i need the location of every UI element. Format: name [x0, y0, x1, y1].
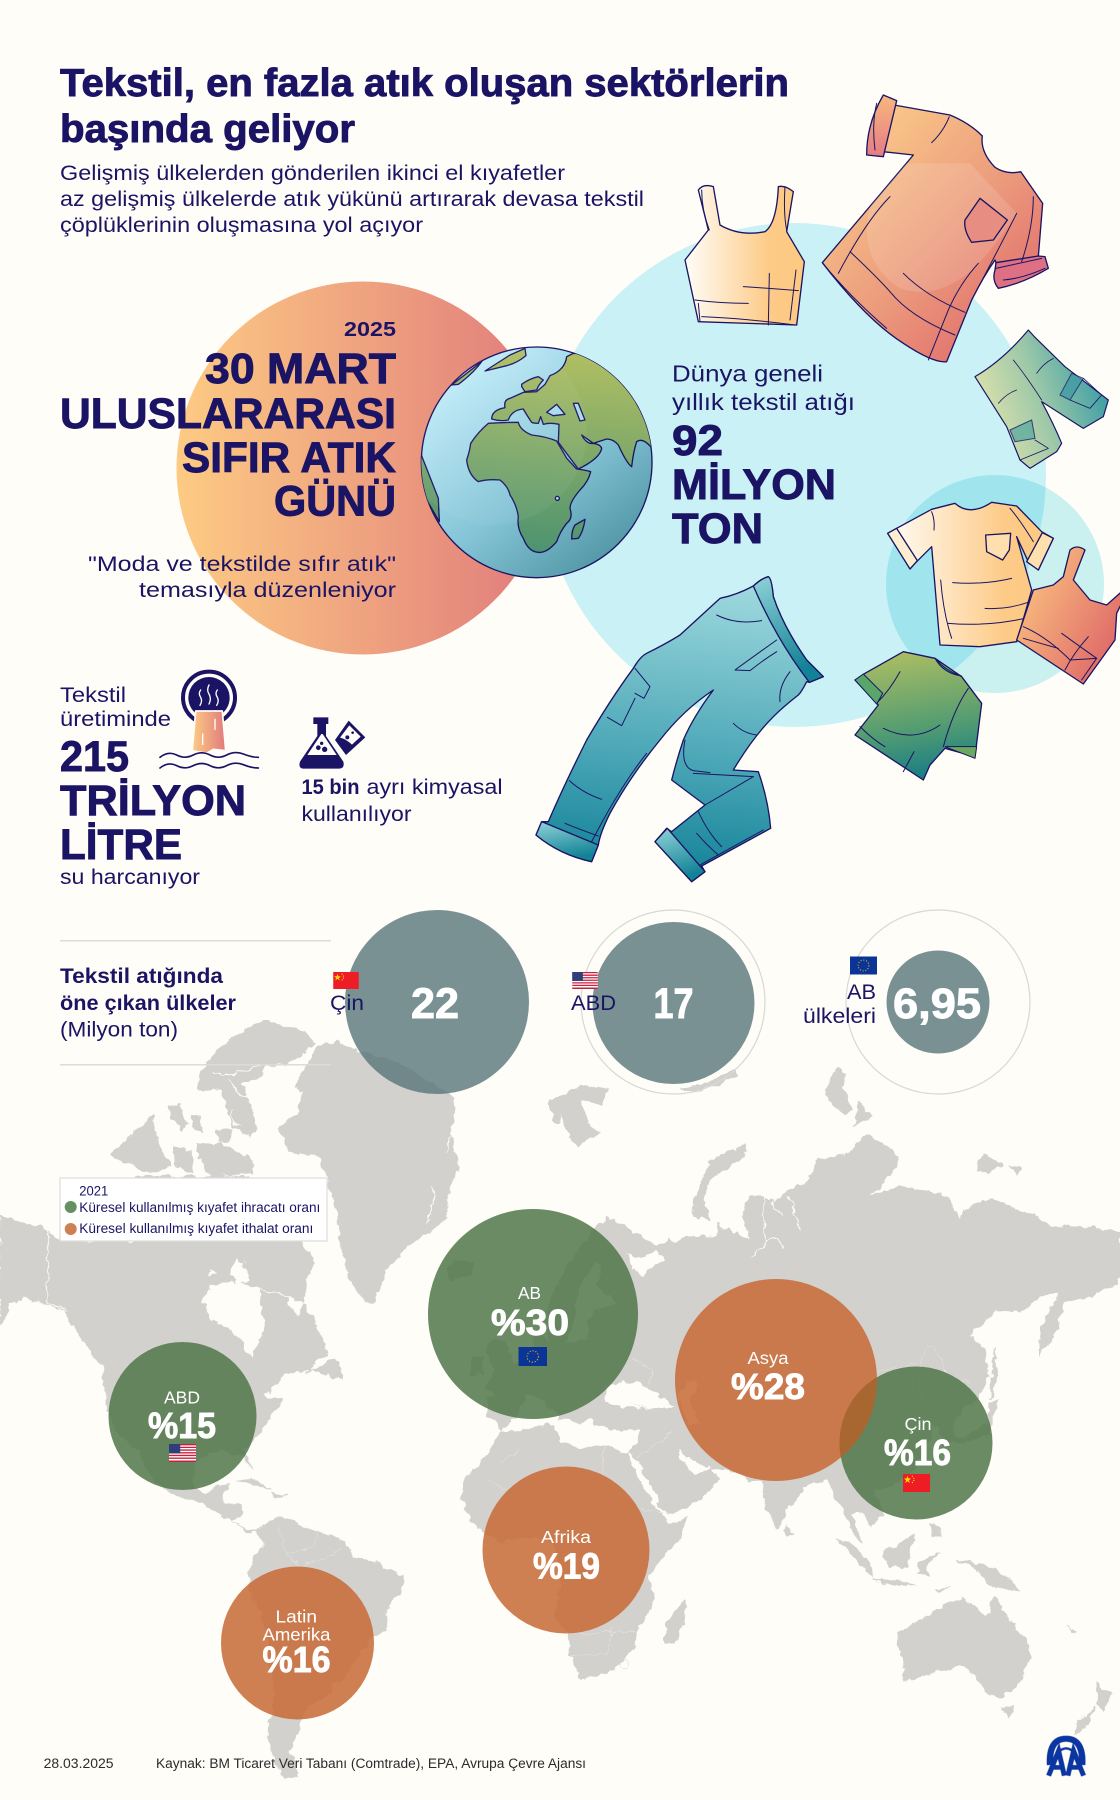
text block: 215 trilyon litre: Tekstil	[60, 684, 126, 707]
bubble: EU export 30%	[428, 1209, 638, 1419]
text block: leading countries heading: Tekstil atığında	[60, 965, 223, 988]
text block: 30 Mart: temasıyla düzenleniyor	[139, 578, 396, 602]
text block: 215 trilyon litre: TRİLYON	[60, 777, 246, 825]
map: africa, south asia, australia and oceania	[463, 1425, 1114, 1733]
text block: 92 milyon ton	[672, 360, 855, 553]
bubble: USA 17: 17	[654, 980, 694, 1028]
legend: Küresel kullanılmış kıyafet ihracatı oranı	[79, 1200, 320, 1215]
bubble: China 22	[330, 910, 529, 1094]
text block: 30 Mart: ULUSLARARASI	[60, 390, 396, 438]
text block: 15 bin kimyasal: ayrı kimyasal	[366, 776, 502, 799]
icon: orange t-shirt	[822, 95, 1048, 362]
world map	[0, 1020, 1120, 1778]
legend	[60, 1178, 327, 1241]
icon: jeans	[536, 577, 823, 882]
bubble: USA 17	[571, 910, 765, 1094]
header: title: Tekstil, en fazla atık oluşan sektörlerin	[60, 62, 789, 105]
bubble: Africa import 19%: %19	[533, 1546, 600, 1586]
panel: light blue circle	[542, 223, 1046, 727]
text block: 30 Mart: 30 MART	[205, 345, 396, 393]
bubble: China export 16%: %16	[884, 1432, 951, 1473]
header: subtitle	[60, 162, 644, 237]
bubble: EU 6,95: 6,95	[893, 980, 981, 1028]
header: subtitle: az gelişmiş ülkelerde atık yükünü artırarak devasa tekstil	[60, 188, 644, 211]
header: subtitle: çöplüklerinin oluşmasına yol açıyor	[60, 214, 423, 237]
text block: 92 milyon ton: Dünya geneli	[672, 360, 823, 386]
bubble: EU 6,95: ülkeleri	[803, 1005, 876, 1028]
map: central america and south america	[107, 1398, 402, 1778]
bubble: USA 17: ABD	[571, 992, 616, 1015]
header: title: başında geliyor	[60, 108, 355, 151]
bubble: EU 6,95	[803, 910, 1030, 1094]
icon: shorts	[975, 330, 1108, 468]
text block: 30 Mart: SIFIR ATIK	[182, 434, 396, 482]
bubble: Latin America import 16%: %16	[262, 1639, 330, 1680]
icon: globe	[420, 346, 653, 578]
text block: 92 milyon ton: 92	[672, 417, 723, 465]
bubble: USA export 15%: ABD	[164, 1388, 200, 1408]
icon: green t-shirt	[855, 652, 982, 780]
legend: 2021	[79, 1184, 108, 1198]
bubble: Latin America import 16%: Latin	[276, 1606, 317, 1626]
bubble: Latin America import 16%: Amerika	[262, 1624, 331, 1644]
text block: leading countries heading	[60, 940, 331, 1066]
text block: 215 trilyon litre: su harcanıyor	[60, 866, 200, 889]
header: subtitle: Gelişmiş ülkelerden gönderilen ikinci el kıyafetler	[60, 162, 565, 185]
text block: 30 Mart	[60, 319, 396, 602]
text block: 92 milyon ton: MİLYON	[672, 461, 836, 509]
text block: 15 bin kimyasal: kullanılıyor	[302, 803, 412, 826]
bubble: Asia import 28%	[675, 1279, 992, 1520]
text block: 215 trilyon litre: LİTRE	[60, 821, 182, 869]
bubble: Asia import 28%: %28	[731, 1366, 805, 1407]
text block: 30 Mart: GÜNÜ	[274, 478, 396, 526]
map: north america and greenland	[0, 1020, 459, 1412]
text block: 215 trilyon litre: üretiminde	[60, 708, 171, 731]
panel: second blue circle	[886, 475, 1104, 693]
text block: leading countries heading: (Milyon ton)	[60, 1018, 178, 1042]
bubble: Asia import 28%: Asya	[748, 1348, 789, 1368]
bubble: Africa import 19%: Afrika	[541, 1527, 591, 1547]
text block: 15 bin kimyasal: 15 bin	[302, 776, 360, 799]
icon: waste pipe	[160, 672, 258, 768]
legend: Küresel kullanılmış kıyafet ithalat oranı	[79, 1221, 313, 1236]
bubble: USA export 15%	[108, 1342, 256, 1490]
bubble: China 22: Çin	[330, 992, 364, 1015]
bubble: Latin America import 16%	[221, 1566, 374, 1720]
icon: tank top	[685, 186, 804, 325]
text block: 30 Mart: 2025	[344, 319, 396, 341]
bubble: China export 16%	[840, 1366, 992, 1520]
bubble: China 22: 22	[411, 980, 459, 1028]
footer: date: 28.03.2025	[44, 1756, 114, 1771]
bubble: EU 6,95: AB	[847, 981, 876, 1004]
panel: orange gradient circle	[176, 282, 550, 654]
bubble: Africa import 19%	[482, 1466, 650, 1634]
icon: cream t-shirt	[888, 502, 1053, 647]
footer: source: Kaynak: BM Ticaret Veri Tabanı (Comtrade), EPA, Avrupa Çevre Ajansı	[156, 1756, 586, 1771]
bubble: China export 16%: Çin	[904, 1414, 932, 1434]
text block: leading countries heading: öne çıkan ülkeler	[60, 992, 236, 1015]
bubble: EU export 30%: AB	[518, 1283, 541, 1303]
icon: chemical flasks	[299, 717, 365, 769]
text block: 215 trilyon litre	[60, 684, 246, 889]
text block: 15 bin kimyasal	[302, 776, 502, 826]
bubble: USA export 15%: %15	[148, 1405, 216, 1446]
text block: 30 Mart: "Moda ve tekstilde sıfır atık"	[88, 552, 396, 576]
header: title	[60, 62, 789, 151]
icon: AA logo	[1049, 1739, 1084, 1776]
bubble: EU export 30%: %30	[491, 1302, 569, 1343]
text block: 92 milyon ton: TON	[672, 505, 763, 553]
icon: orange crop top	[1017, 547, 1120, 684]
map: eurasia, europe and arctic islands	[446, 1067, 1120, 1543]
text block: 215 trilyon litre: 215	[60, 733, 129, 781]
text block: 92 milyon ton: yıllık tekstil atığı	[672, 389, 855, 415]
